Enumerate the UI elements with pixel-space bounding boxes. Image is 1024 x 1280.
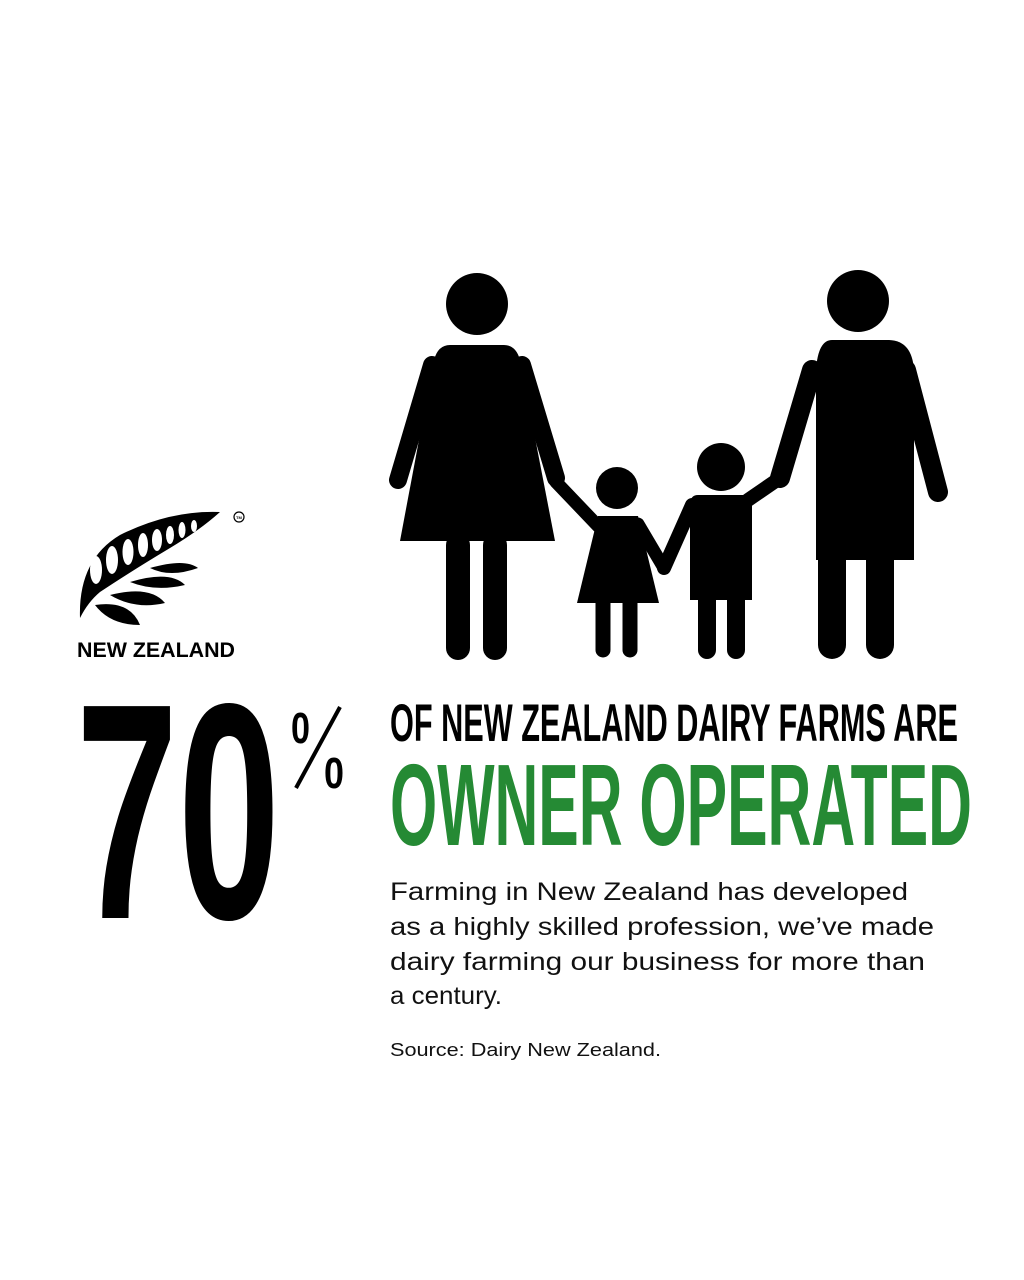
body text: as a highly skilled profession, we’ve made bbox=[390, 913, 934, 941]
percent sign bbox=[291, 704, 344, 798]
percent sign: 0 bbox=[324, 749, 344, 798]
figure: girl bbox=[556, 467, 664, 650]
logo: New Zealand fern: TM bbox=[236, 515, 242, 520]
body text: a century. bbox=[390, 982, 502, 1010]
source: Source: Dairy New Zealand. bbox=[390, 1040, 661, 1060]
body text: Farming in New Zealand has developed bbox=[390, 878, 908, 906]
logo text: NEW ZEALAND bbox=[77, 639, 235, 662]
figure: boy bbox=[664, 443, 780, 650]
figure: woman bbox=[398, 273, 556, 648]
body text bbox=[390, 878, 934, 1010]
logo: New Zealand fern bbox=[77, 512, 244, 662]
illustration: family holding hands bbox=[398, 270, 938, 650]
percent sign: 0 bbox=[291, 704, 310, 753]
figure: man bbox=[780, 270, 938, 645]
big number: 70: 70 bbox=[76, 640, 280, 984]
body text: dairy farming our business for more than bbox=[390, 948, 925, 976]
